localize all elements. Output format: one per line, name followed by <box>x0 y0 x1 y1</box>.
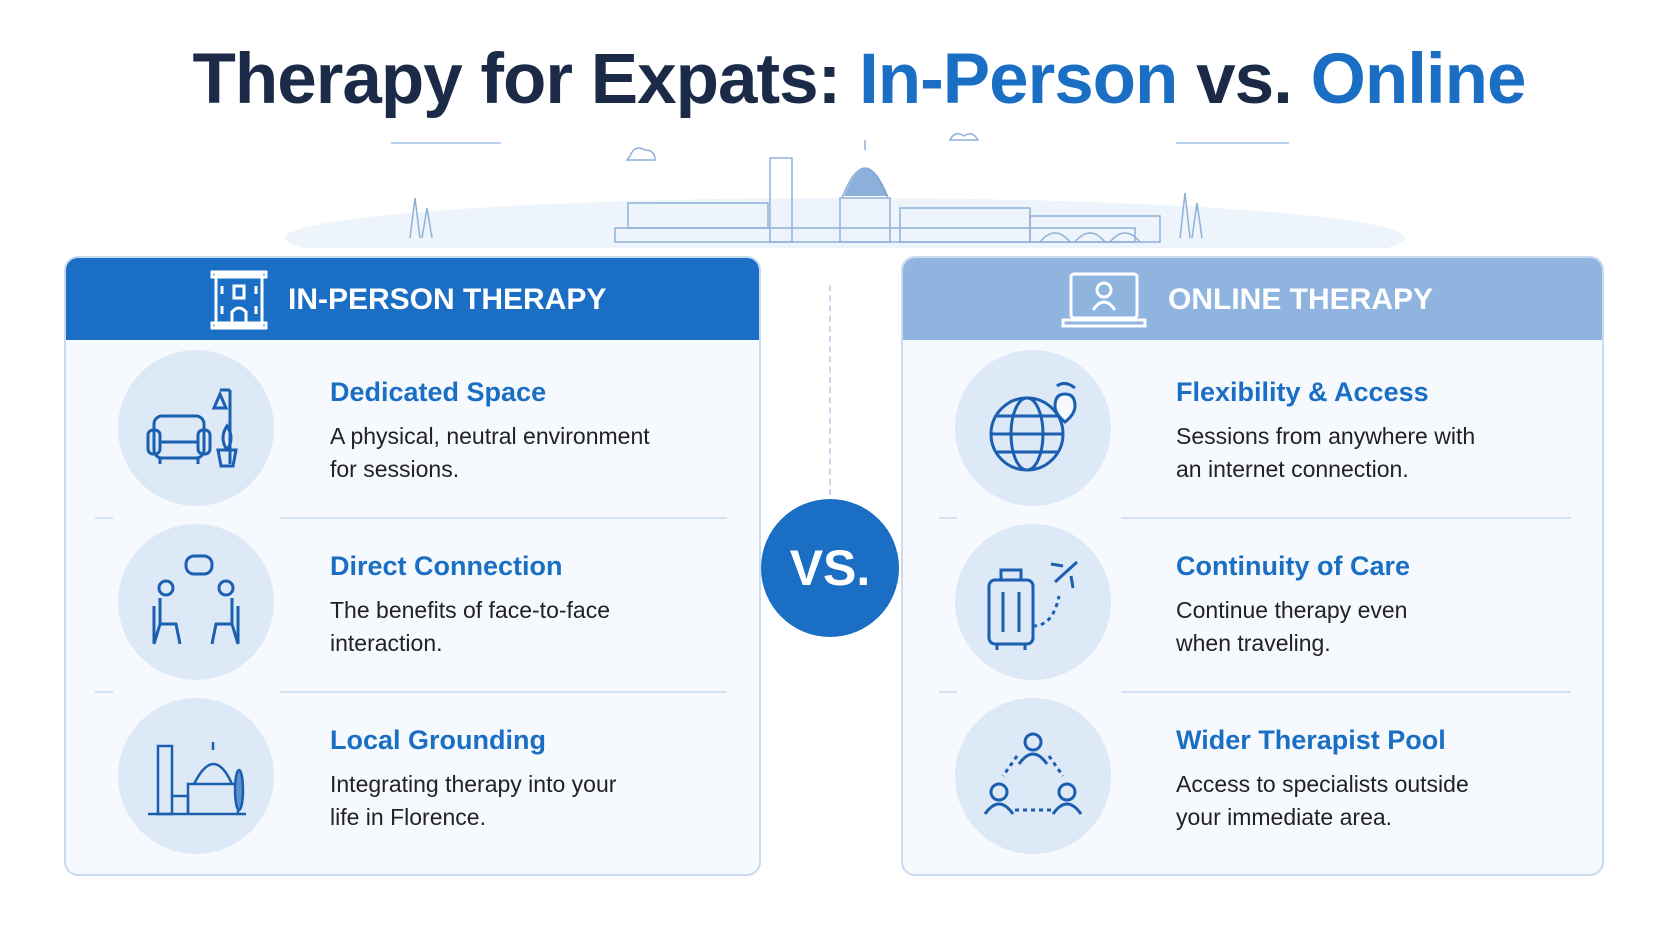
item: local grounding <box>118 698 616 854</box>
panel: in-person therapy <box>64 256 761 876</box>
item: continuity: when traveling. <box>1176 630 1331 656</box>
icon: building <box>210 270 268 330</box>
item: direct connection: Direct Connection <box>330 551 563 581</box>
item: dedicated space: A physical, neutral environment <box>330 423 650 449</box>
item: wider pool: your immediate area. <box>1176 804 1392 830</box>
item: flexibility: Flexibility & Access <box>1176 377 1429 407</box>
item: direct connection <box>118 524 610 680</box>
icon: laptop <box>1062 272 1146 328</box>
icon: florence city <box>118 698 274 854</box>
item: continuity: Continuity of Care <box>1176 551 1410 581</box>
item: dedicated space: Dedicated Space <box>330 377 546 407</box>
item: flexibility <box>955 350 1475 506</box>
VS badge: VS. <box>790 540 870 596</box>
item: wider pool: Wider Therapist Pool <box>1176 725 1446 755</box>
item: flexibility: an internet connection. <box>1176 456 1409 482</box>
item: continuity <box>955 524 1410 680</box>
item: continuity: Continue therapy even <box>1176 597 1407 623</box>
header: in-person: IN-PERSON THERAPY <box>288 283 606 316</box>
item: direct connection: interaction. <box>330 630 443 656</box>
item: flexibility: Sessions from anywhere with <box>1176 423 1475 449</box>
item: direct connection: The benefits of face-to-face <box>330 597 610 623</box>
VS badge <box>761 499 899 637</box>
vertical dashed divider <box>829 285 831 495</box>
icon: suitcase and plane <box>955 524 1111 680</box>
item: dedicated space: for sessions. <box>330 456 459 482</box>
item: local grounding: Integrating therapy into your <box>330 771 616 797</box>
item: wider pool: Access to specialists outside <box>1176 771 1469 797</box>
icon: armchair <box>118 350 274 506</box>
item: local grounding: life in Florence. <box>330 804 486 830</box>
header: online <box>903 258 1602 340</box>
header: in-person <box>66 258 759 340</box>
header: online: ONLINE THERAPY <box>1168 283 1433 316</box>
icon: two people talking <box>118 524 274 680</box>
skyline illustration <box>285 133 1405 248</box>
icon: network of people <box>955 698 1111 854</box>
title: Therapy for Expats: In-Person vs. Online <box>192 40 1526 119</box>
panel: online therapy <box>901 256 1604 876</box>
item: dedicated space <box>118 350 650 506</box>
item: wider pool <box>955 698 1469 854</box>
item: local grounding: Local Grounding <box>330 725 546 755</box>
icon: globe <box>955 350 1111 506</box>
